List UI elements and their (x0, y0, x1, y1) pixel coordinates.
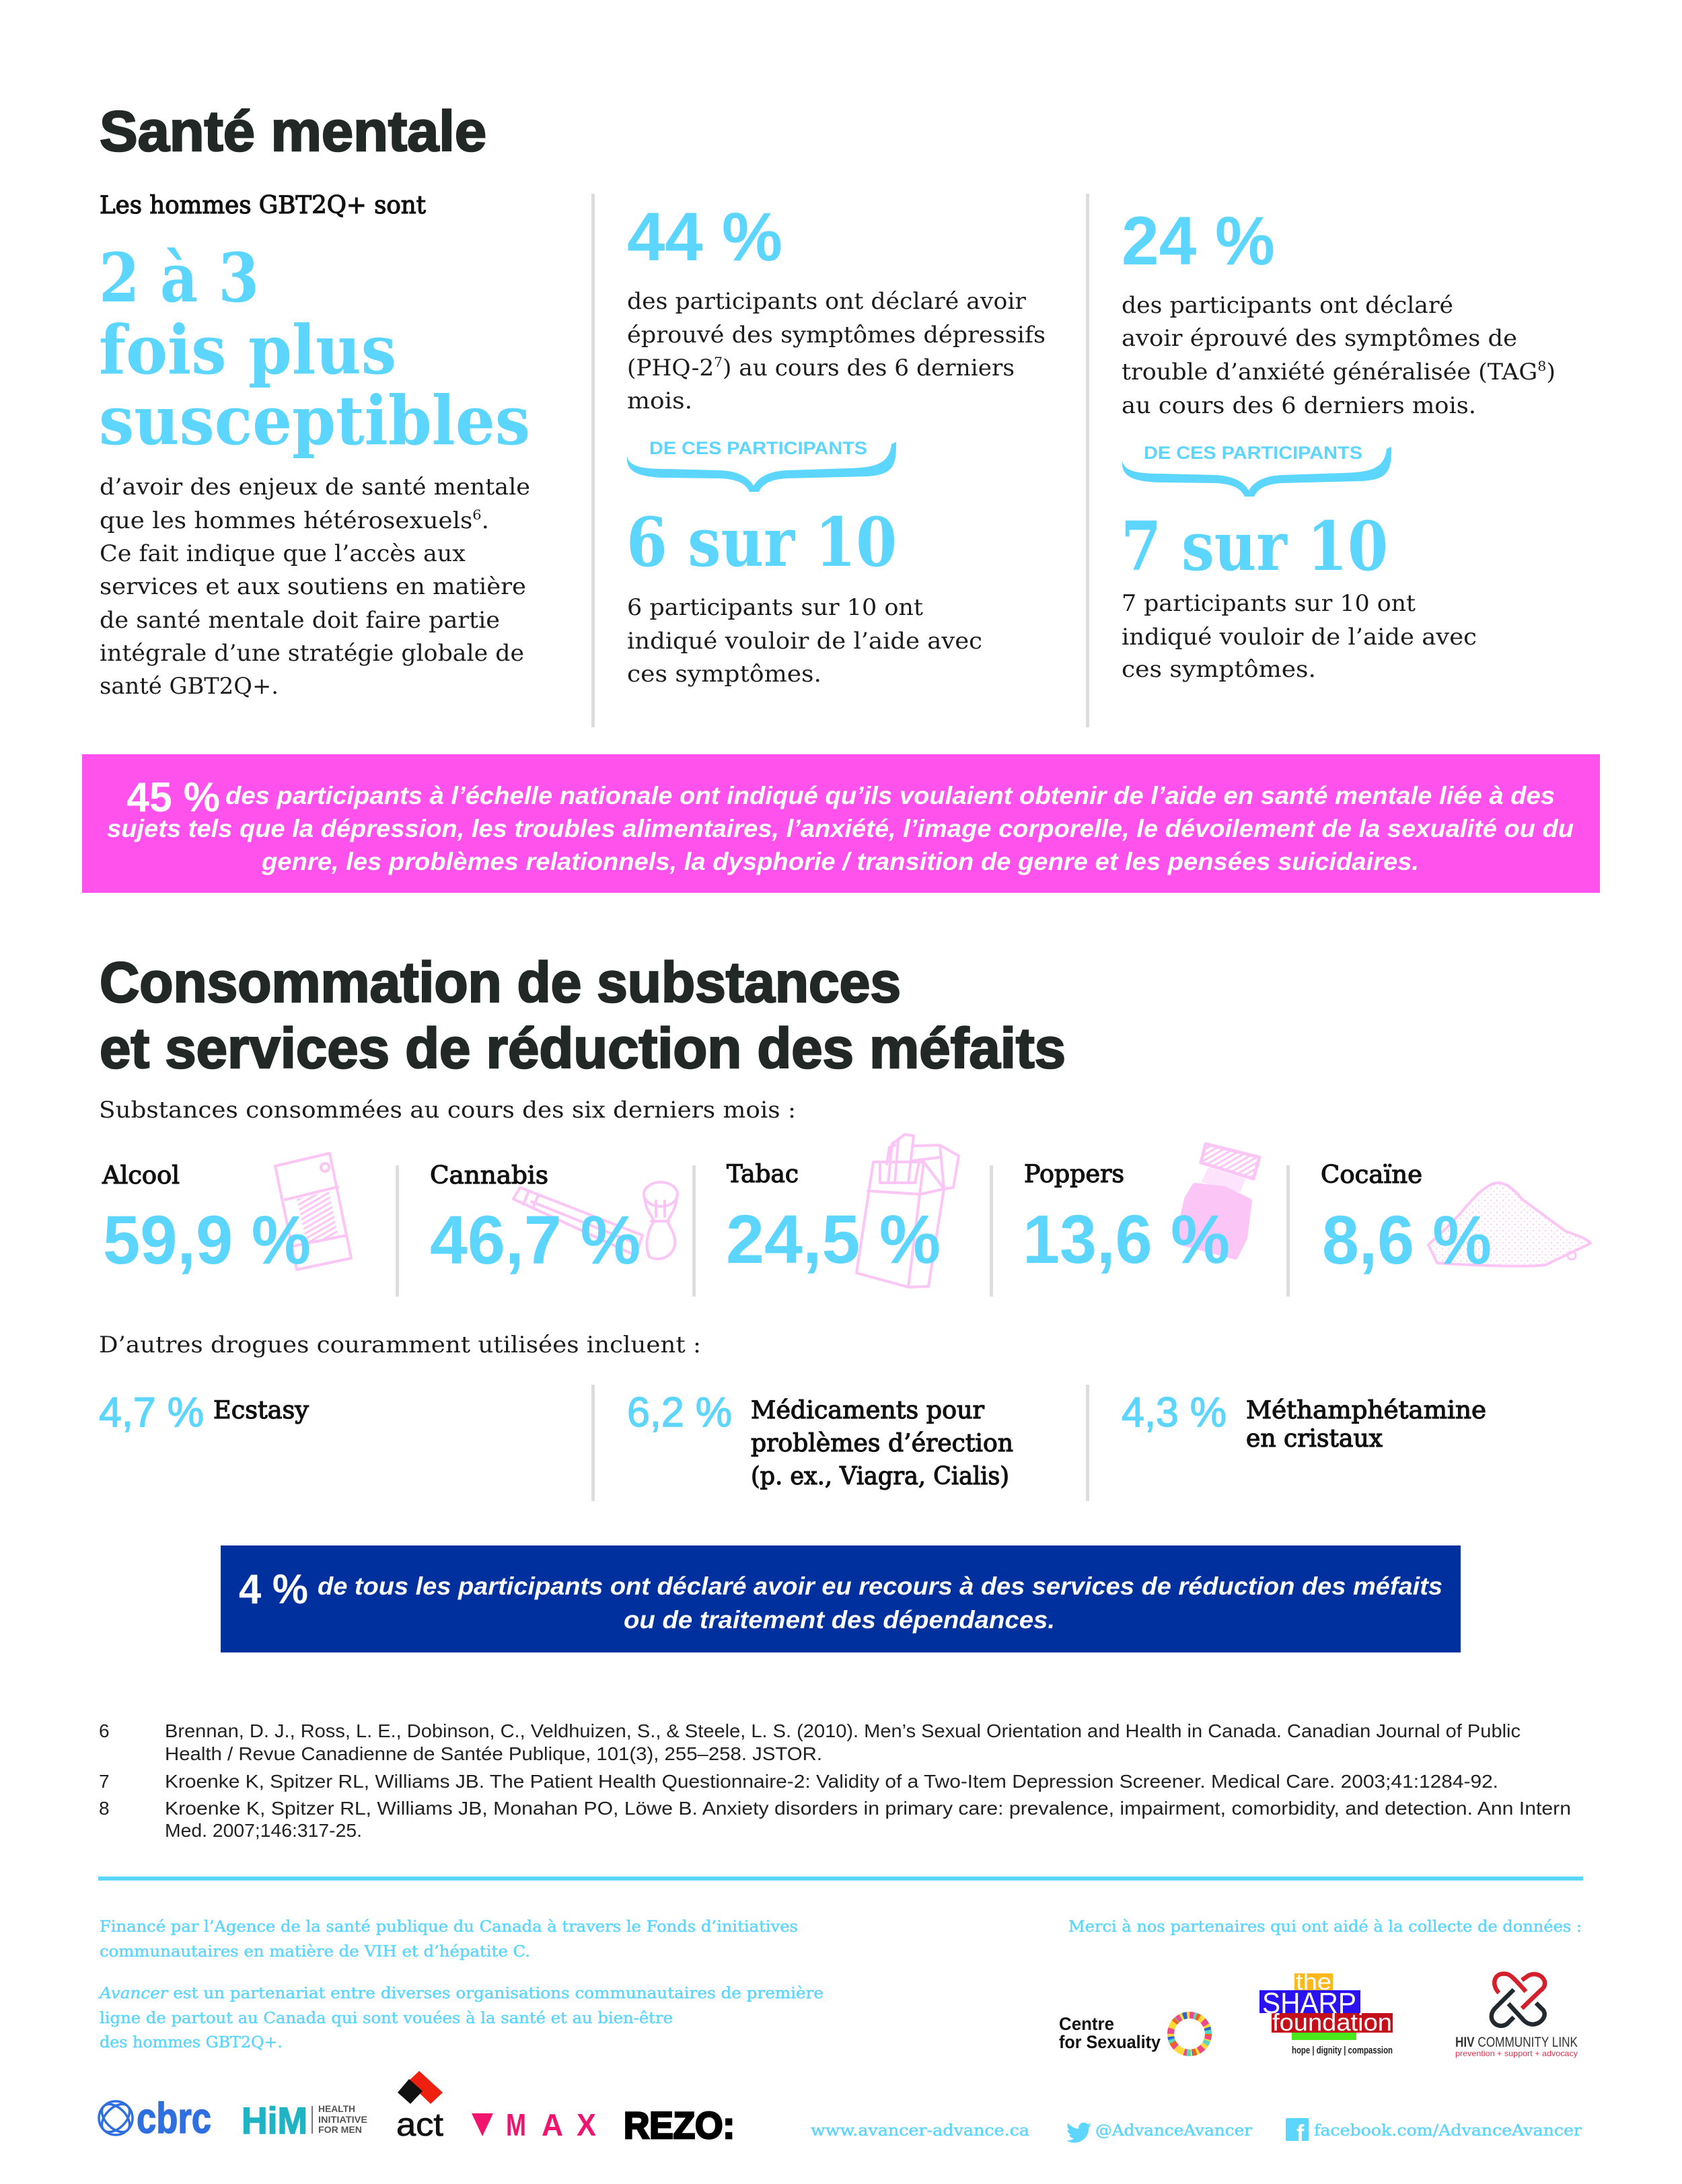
body text: services et aux soutiens en matière (100, 573, 526, 600)
callout: 4 % banner: 4 % (239, 1566, 308, 1613)
label: Cannabis (430, 1162, 548, 1190)
stat: erectile medication: (p. ex., Viagra, Cialis) (751, 1463, 1009, 1490)
logo: the SHARP foundation: hope | dignity | compassion (1292, 2045, 1393, 2056)
value: 8,6 % (1322, 1202, 1492, 1278)
description: trouble d’anxiété généralisée (TAG (1122, 359, 1527, 386)
panel: Cannabis (430, 1162, 678, 1278)
logo: VMAX (472, 2107, 596, 2142)
logo: the SHARP foundation: foundation (1272, 2008, 1392, 2036)
panel: 24 % anxiety symptoms (1121, 203, 1556, 683)
description: des participants ont déclaré avoir (627, 288, 1027, 315)
callout: 4 % banner (221, 1545, 1461, 1652)
callout: 45 % banner: sujets tels que la dépression, les troubles alimentaires, l’anxiété, l’image corporelle, le dévoilement de la sexualité ou du (107, 815, 1574, 842)
logo: Centre for Sexuality: for Sexuality (1059, 2032, 1161, 2052)
label: de ces participants: DE CES PARTICIPANTS (649, 438, 867, 458)
logo: Centre for Sexuality: Centre (1059, 2014, 1114, 2034)
value: 24,5 % (726, 1201, 941, 1278)
logo: HIV Community Link (1455, 1973, 1578, 2058)
label: Cocaïne (1321, 1161, 1422, 1189)
callout: 4 % banner: de tous les participants ont déclaré avoir eu recours à des services de réduction des méfaits (318, 1572, 1442, 1600)
icon: poppers bottle (1179, 1144, 1259, 1257)
description: 6 participants sur 10 ont (627, 594, 923, 621)
logo: HiM (242, 2099, 367, 2142)
stat: crystal meth: Méthamphétamine (1246, 1397, 1486, 1424)
description: ces symptômes. (1122, 656, 1316, 683)
heading: Consommation de substances (100, 951, 1066, 1080)
stat: erectile medication: Médicaments pour (751, 1397, 985, 1424)
stat: Ecstasy: 4,7 % (99, 1389, 204, 1436)
stat 44 %: 44 % (627, 198, 782, 275)
references (99, 1720, 1571, 1841)
description (1122, 590, 1477, 683)
icon: facebook: f (1296, 2121, 1305, 2146)
description: ) (1546, 359, 1556, 386)
label: de ces participants: DE CES PARTICIPANTS (1144, 443, 1362, 463)
big statement (99, 238, 530, 460)
description: indiqué vouloir de l’aide avec (1122, 624, 1477, 651)
icon: cigarette pack (856, 1134, 959, 1287)
references: 8 (99, 1798, 110, 1819)
references: Med. 2007;146:317-25. (165, 1820, 362, 1841)
references: Health / Revue Canadienne de Santée Publique, 101(3), 255–258. JSTOR. (165, 1743, 822, 1764)
icon: twitter bird (1066, 2123, 1091, 2143)
subheading: autres drogues: D’autres drogues couramment utilisées incluent : (99, 1332, 701, 1358)
panel: 44 % depressive symptoms (626, 198, 1046, 688)
body text: que les hommes hétérosexuels (100, 507, 455, 534)
stat: Ecstasy (99, 1389, 309, 1436)
logo: HiM: FOR MEN (318, 2124, 362, 2135)
funding text: communautaires en matière de VIH et d’hépatite C. (100, 1943, 530, 1961)
value: 13,6 % (1023, 1201, 1230, 1278)
intro line: Les hommes GBT2Q+ sont (100, 192, 427, 219)
description: ces symptômes. (627, 661, 821, 688)
funding text (98, 1918, 824, 2051)
stat: erectile medication: problèmes d’érection (751, 1430, 1013, 1457)
panel: 2 à 3 fois plus susceptibles (99, 192, 530, 700)
icon: liquor bottle (275, 1153, 351, 1270)
logo: VMAX: A (542, 2107, 563, 2142)
callout: 45 % banner: genre, les problèmes relationnels, la dysphorie / transition de genre et les pensées suicidaires. (261, 848, 1419, 875)
stat: crystal meth: 4,3 % (1122, 1389, 1227, 1436)
label: Alcool (102, 1162, 180, 1190)
value: 46,7 % (430, 1202, 641, 1278)
description: 7 (714, 354, 723, 370)
label: Tabac (727, 1161, 799, 1188)
stat 24 %: 24 % (1122, 203, 1275, 279)
icon: pipe (513, 1182, 678, 1259)
stat: Ecstasy: Ecstasy (213, 1397, 309, 1424)
panel: Cocaïne (1321, 1161, 1590, 1278)
description: 7 participants sur 10 ont (1122, 590, 1416, 617)
logo: the SHARP foundation: SHARP (1262, 1987, 1356, 2020)
partners heading: Merci à nos partenaires qui ont aidé à la collecte de données : (1068, 1918, 1582, 1936)
panel: Tabac (726, 1134, 959, 1287)
big statement: susceptibles (99, 381, 530, 460)
funding text: ligne de partout au Canada qui sont vouées à la santé et au bien-être (100, 2010, 673, 2027)
references: Kroenke K, Spitzer RL, Williams JB, Monahan PO, Löwe B. Anxiety disorders in primary care: prevalence, impairment, comorbidity, and detection. Ann Intern (165, 1798, 1571, 1819)
subheading: substances: Substances consommées au cours des six derniers mois : (99, 1097, 796, 1124)
description (627, 288, 1046, 414)
stat: erectile medication: 6,2 % (627, 1389, 732, 1436)
logo: the SHARP foundation (1259, 1969, 1393, 2056)
body text: 6 (472, 507, 482, 523)
stat: crystal meth (1122, 1389, 1486, 1453)
logo: VMAX: X (577, 2107, 596, 2142)
website link: www.avancer-advance.ca (811, 2122, 1029, 2140)
icon: curly brace (627, 442, 896, 492)
description: mois. (627, 388, 692, 414)
icon: powder pile (1428, 1183, 1590, 1266)
description: éprouvé des symptômes dépressifs (627, 322, 1046, 349)
stat: crystal meth: en cristaux (1246, 1425, 1383, 1453)
heading: Santé mentale: Santé mentale (100, 100, 486, 163)
body text: intégrale d’une stratégie globale de (100, 640, 524, 667)
references: Kroenke K, Spitzer RL, Williams JB. The Patient Health Questionnaire-2: Validity of a Two-Item Depression Screener. Medical Care. 2003;41:1284-92. (165, 1771, 1498, 1792)
callout: 4 % banner: ou de traitement des dépendances. (624, 1606, 1055, 1634)
icon: facebook (1286, 2118, 1309, 2146)
description: avoir éprouvé des symptômes de (1122, 325, 1517, 352)
logo: VMAX: M (506, 2107, 526, 2142)
big statement: 2 à 3 (99, 238, 259, 318)
logo: HiM: HiM (242, 2099, 307, 2142)
references: Brennan, D. J., Ross, L. E., Dobinson, C., Veldhuizen, S., & Steele, L. S. (2010). Men’s Sexual Orientation and Health in Canada. Canadian Journal of Public (165, 1720, 1521, 1741)
label: Poppers (1024, 1161, 1124, 1188)
logo: REZO: REZO: (624, 2104, 735, 2146)
logo: act (396, 2071, 443, 2143)
handle: facebook: facebook.com/AdvanceAvancer (1314, 2122, 1582, 2140)
funding text: Financé par l’Agence de la santé publique du Canada à travers le Fonds d’initiatives (100, 1918, 798, 1936)
body text: d’avoir des enjeux de santé mentale (100, 474, 530, 501)
logo: the SHARP foundation: the (1296, 1969, 1331, 1995)
logo: HIV Community Link: HIV COMMUNITY LINK (1455, 2035, 1578, 2050)
panel: Poppers (1023, 1144, 1259, 1278)
stat 7 sur 10: 7 sur 10 (1121, 507, 1388, 586)
logo: act: act (396, 2107, 443, 2143)
description (1122, 292, 1556, 419)
heading: Consommation de substances: Consommation de substances (100, 951, 901, 1014)
handle: twitter: @AdvanceAvancer (1095, 2122, 1252, 2140)
heading: Consommation de substances: et services de réduction des méfaits (100, 1017, 1066, 1080)
big statement: fois plus (99, 310, 396, 390)
icon: curly brace (1122, 447, 1391, 497)
logo: cbrc: cbrc (137, 2094, 211, 2142)
callout: 45 % banner: des participants à l’échelle nationale ont indiqué qu’ils voulaient obtenir de l’aide en santé mentale liée à des (225, 782, 1555, 809)
callout: 45 % banner (82, 754, 1600, 893)
body text (100, 474, 530, 700)
logo: Centre for Sexuality (1059, 2014, 1208, 2053)
logo: HiM: INITIATIVE (318, 2114, 367, 2125)
panel: Alcool (102, 1153, 351, 1278)
description: au cours des 6 derniers mois. (1122, 392, 1476, 419)
references: 7 (99, 1771, 110, 1792)
description: 8 (1537, 358, 1546, 374)
body text: . (482, 507, 489, 534)
description: (PHQ-2 (627, 355, 713, 381)
funding text: Avancer est un partenariat entre diverses organisations communautaires de première (98, 1985, 824, 2002)
references: 6 (99, 1720, 110, 1741)
logo: cbrc (97, 2094, 211, 2142)
value: 59,9 % (103, 1202, 311, 1278)
description (627, 594, 982, 688)
logo: HIV Community Link: prevention + support + advocacy (1455, 2049, 1578, 2058)
funding text: des hommes GBT2Q+. (100, 2034, 283, 2051)
description: ) au cours des 6 derniers (723, 355, 1015, 381)
callout: 45 % banner: 45 % (126, 774, 220, 821)
stat: erectile medication (627, 1389, 1013, 1490)
stat 6 sur 10: 6 sur 10 (626, 503, 897, 582)
body text: de santé mentale doit faire partie (100, 607, 500, 634)
description: des participants ont déclaré (1122, 292, 1453, 319)
description: indiqué vouloir de l’aide avec (627, 628, 982, 655)
body text: santé GBT2Q+. (100, 673, 279, 700)
body text: Ce fait indique que l’accès aux (100, 540, 466, 567)
logo: HiM: HEALTH (318, 2103, 355, 2114)
